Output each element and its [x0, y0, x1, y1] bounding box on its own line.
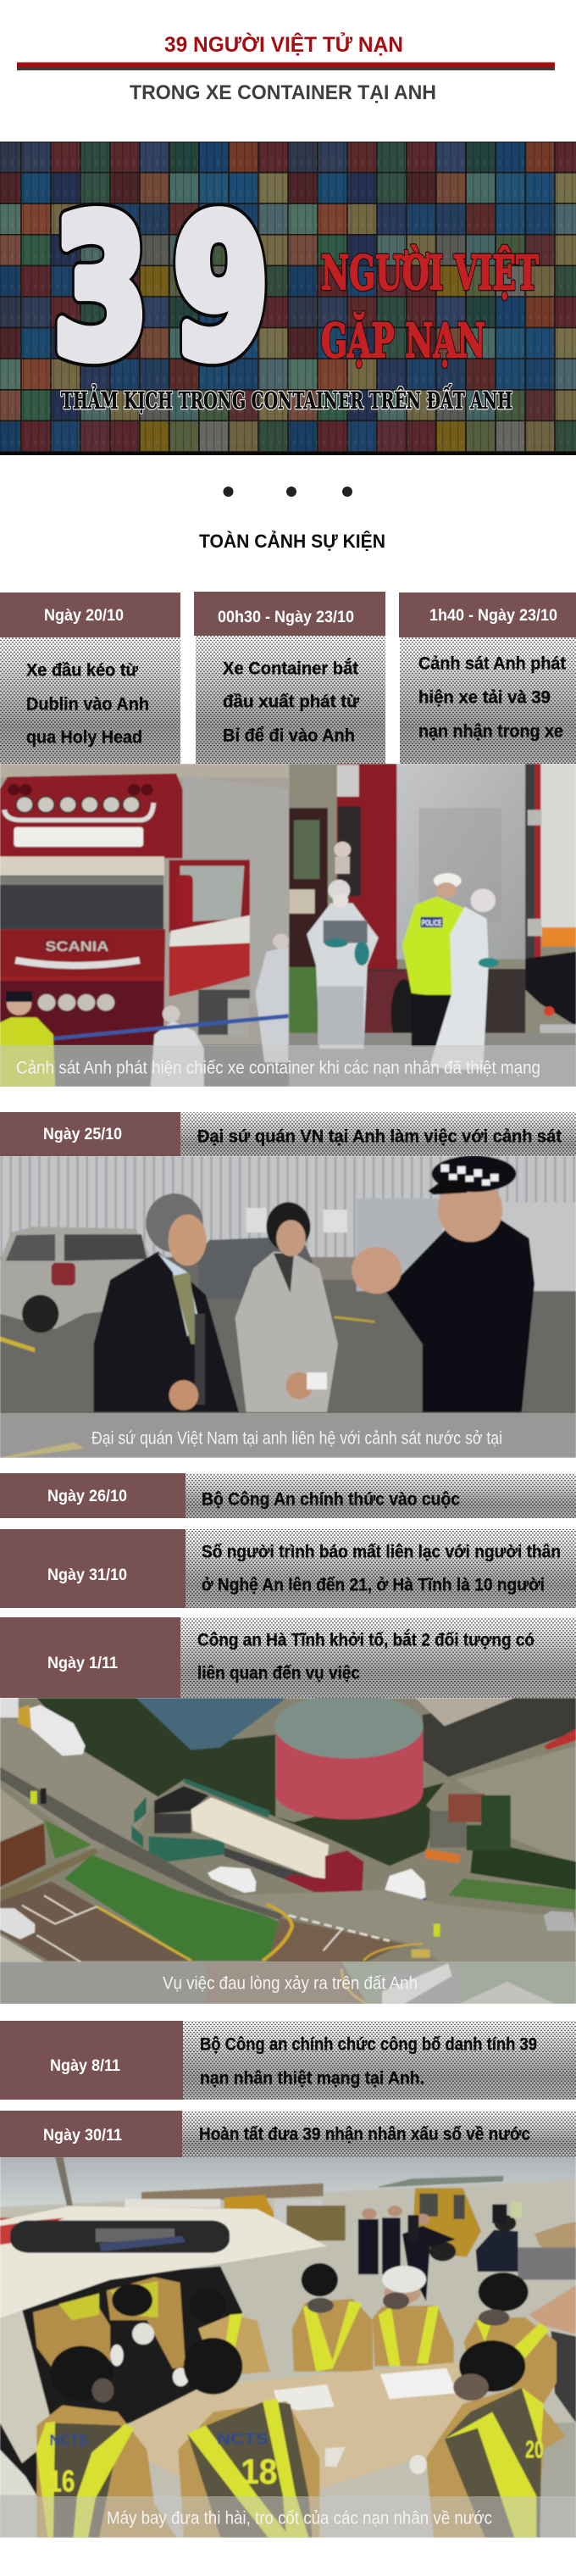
- caption band: Vụ việc đau lòng xảy ra trên đất Anh: [163, 1973, 418, 1994]
- card: 1h40 23/10: hiện xe tải và 39: [418, 687, 551, 707]
- row: 26/10: Bộ Công An chính thức vào cuộc: [202, 1488, 460, 1509]
- caption band: Máy bay đưa thi hài, tro cốt của các nạn nhân về nước: [107, 2507, 492, 2528]
- row: 31/10: Ngày 31/10: [47, 1566, 127, 1584]
- row: 25/10: [0, 1112, 576, 1156]
- card: 00h30 23/10: đầu xuất phát từ: [223, 692, 359, 712]
- card: 1h40 23/10: [399, 593, 576, 764]
- big number 39: [53, 178, 269, 400]
- caption band: [0, 2496, 576, 2538]
- three dots: [224, 487, 352, 497]
- row: 1/11: [0, 1617, 576, 1698]
- row: 26/10: [0, 1473, 576, 1518]
- big number 39: 9: [173, 178, 269, 400]
- row: 25/10: Ngày 25/10: [43, 1125, 122, 1143]
- big number 39: 9: [173, 178, 269, 400]
- row: 31/10: [0, 1529, 576, 1608]
- photo: workers carrying a coffin from the ambulance: 20: [525, 2436, 544, 2463]
- row: 1/11: liên quan đến vụ việc: [197, 1663, 360, 1683]
- row: 30/11: [0, 2111, 576, 2157]
- photo: workers carrying a coffin from the ambulance: NCTS: [217, 2430, 269, 2448]
- card: 00h30 23/10: Xe Container bắt: [223, 658, 358, 678]
- hero banner: stacked containers: [0, 142, 576, 455]
- heading: người việt gặp nạn: [321, 245, 539, 368]
- card: 20/10: Xe đầu kéo từ: [26, 659, 138, 680]
- card: 00h30 23/10: Bỉ để đi vào Anh: [223, 726, 355, 746]
- heading: người việt gặp nạn: GẶP NẠN: [321, 312, 485, 368]
- row: 8/11: Ngày 8/11: [50, 2056, 120, 2075]
- photo: workers carrying a coffin from the ambulance: NCTS: [50, 2432, 88, 2449]
- row: 8/11: [0, 2021, 576, 2100]
- card: 20/10: [0, 593, 180, 764]
- card: 1h40 23/10: nạn nhận trong xe: [418, 721, 563, 741]
- row: 30/11: Hoàn tất đưa 39 nhận nhân xấu số về nước: [199, 2124, 530, 2145]
- photo: workers carrying a coffin from the ambulance: [0, 2156, 576, 2538]
- card: 20/10: Dublin vào Anh: [26, 693, 149, 714]
- photo: workers carrying a coffin from the ambulance: 16: [48, 2464, 75, 2499]
- photo: red truck and forensic officers: SCANIA: [45, 938, 108, 954]
- card: 20/10: Ngày 20/10: [44, 606, 124, 625]
- big number 39: 3: [53, 178, 148, 400]
- card: 1h40 23/10: Cảnh sát Anh phát: [418, 653, 566, 673]
- section heading: TOÀN CẢNH SỰ KIỆN: [199, 531, 385, 552]
- card: 00h30 23/10: [194, 592, 385, 764]
- big number 39: 3: [53, 178, 148, 400]
- caption band: [0, 1045, 576, 1087]
- caption band: [0, 1961, 576, 2004]
- row: 8/11: nạn nhân thiệt mạng tại Anh.: [200, 2068, 424, 2089]
- title: [17, 31, 555, 104]
- photo: embassy staff with police officer: [0, 1155, 576, 1458]
- card: 20/10: qua Holy Head: [26, 727, 142, 748]
- photo: aerial view of the scene: [0, 1694, 576, 2004]
- title: TRONG XE CONTAINER TẠI ANH: [130, 81, 436, 104]
- photo: red truck and forensic officers: [0, 764, 576, 1087]
- row: 30/11: Ngày 30/11: [43, 2126, 122, 2145]
- card: 00h30 23/10: 00h30 - Ngày 23/10: [218, 608, 354, 626]
- row: 31/10: ở Nghệ An lên đến 21, ở Hà Tĩnh là 10 người: [202, 1575, 545, 1595]
- photo: red truck and forensic officers: POLICE: [422, 919, 441, 928]
- caption band: [0, 1413, 576, 1458]
- row: 1/11: Ngày 1/11: [47, 1654, 118, 1672]
- title: 39 NGƯỜI VIỆT TỬ NẠN: [164, 31, 403, 57]
- photo: workers carrying a coffin from the ambulance: 18: [241, 2452, 277, 2491]
- row: 1/11: Công an Hà Tĩnh khởi tố, bắt 2 đối tượng có: [197, 1629, 534, 1650]
- heading: người việt gặp nạn: GẶP NẠN: [321, 312, 485, 368]
- card: 1h40 23/10: 1h40 - Ngày 23/10: [429, 606, 557, 625]
- row: 26/10: Ngày 26/10: [47, 1487, 127, 1505]
